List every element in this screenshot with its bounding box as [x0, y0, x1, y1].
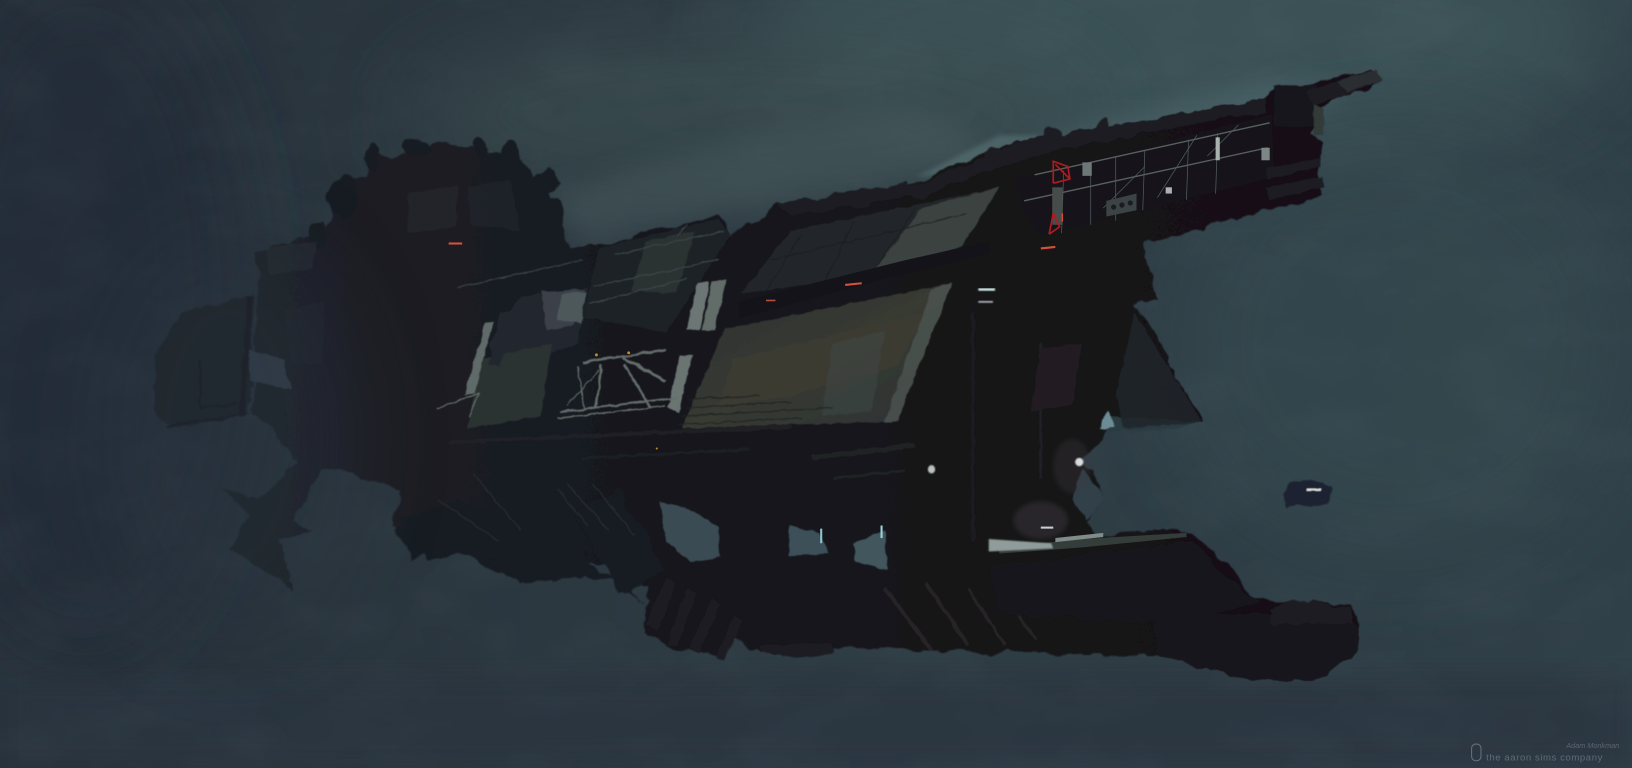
fog-coloured gaps in the hull: [248, 349, 1195, 570]
hull silhouette: [154, 70, 1382, 679]
arm control panel with wiring: [1015, 114, 1274, 249]
lower hull ribs: [437, 312, 1041, 650]
underside teeth: [645, 578, 833, 660]
left pod details: [167, 297, 250, 427]
mid-hull scaffolding and plating: [458, 219, 731, 429]
engine block at bow: [989, 541, 1358, 679]
red light on dome: [449, 242, 462, 245]
dome knobs: [308, 135, 563, 249]
signature: Adam Monkman: [1565, 741, 1619, 750]
hull dark ridge along top of arm: [775, 100, 1265, 216]
company name: the aaron sims company: [1486, 753, 1603, 764]
cyan highlights: [820, 288, 995, 543]
hull panel: large lower plate: [679, 283, 952, 429]
dome details: [265, 179, 520, 364]
haze over the far end of the ship: [94, 229, 364, 645]
small distant drone: [1283, 480, 1332, 508]
artist credit: [1472, 741, 1619, 764]
dark spine between plates: [739, 241, 989, 318]
truss scaffold: [437, 350, 677, 418]
spaceship: [154, 70, 1382, 679]
gun barrel and forks: [1266, 70, 1382, 200]
white panel strips: [464, 279, 727, 412]
right strut interior: [1030, 312, 1202, 429]
logo mark: [1472, 744, 1481, 761]
hull panel: upper plate: [741, 187, 999, 293]
jagged underside: [393, 488, 666, 604]
amber lights: [595, 351, 658, 450]
lit deck and sparks: [928, 439, 1186, 554]
